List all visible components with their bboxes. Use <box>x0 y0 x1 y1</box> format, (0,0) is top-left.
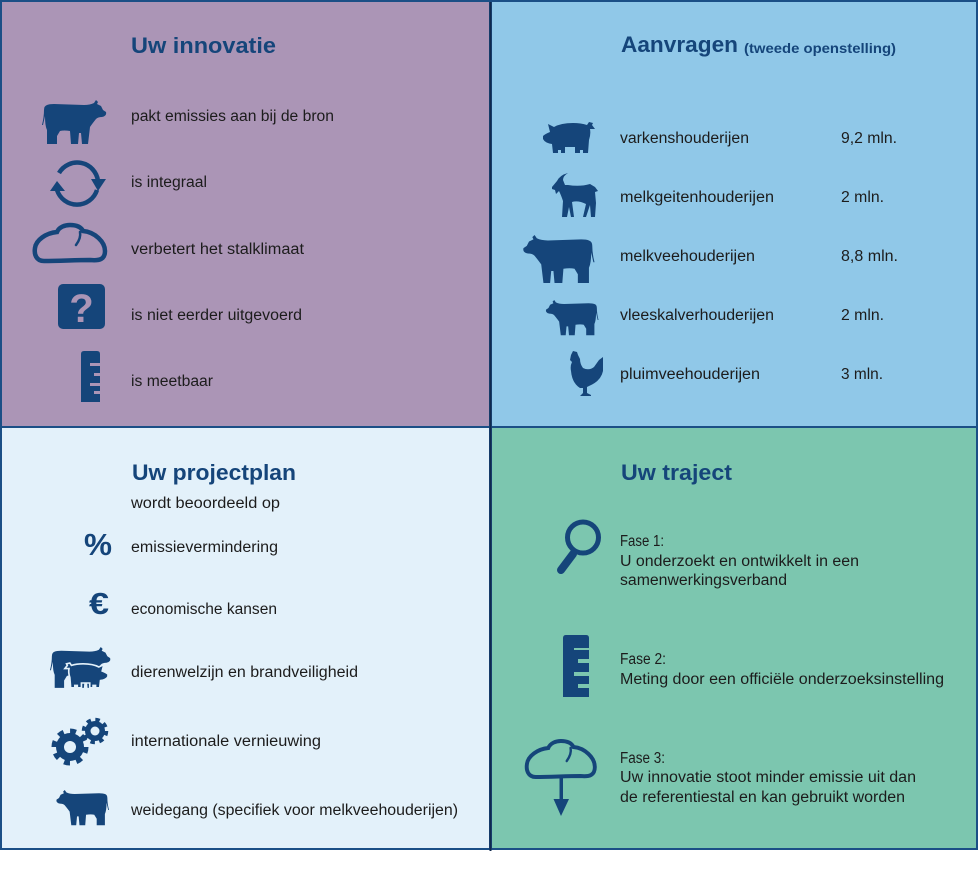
icon: ruler <box>81 351 100 402</box>
icon: question mark square: ? <box>69 287 94 331</box>
text: is niet eerder uitgevoerd: is niet eerder uitgevoerd <box>131 307 302 324</box>
icon: goat <box>552 173 598 217</box>
icon: cow <box>42 100 106 144</box>
text: fase 3: Uw innovatie stoot minder emissie uit dan <box>620 769 916 786</box>
text: is integraal: is integraal <box>131 174 207 191</box>
icon: pig <box>543 122 595 153</box>
icon: dairy cow <box>523 235 594 283</box>
panel: Uw traject <box>491 427 977 849</box>
icon: question mark square <box>58 284 105 331</box>
icon: percent: % <box>84 527 112 562</box>
text: melkgeitenhouderijen: melkgeitenhouderijen <box>620 189 774 206</box>
heading: Uw traject: Uw traject <box>621 460 733 485</box>
icon: cloud with down arrow <box>527 741 595 816</box>
text: fase 2 <box>620 651 944 688</box>
panel: Aanvragen <box>491 1 977 427</box>
text: internationale vernieuwing: internationale vernieuwing <box>131 733 321 750</box>
heading: Uw innovatie: Uw innovatie <box>131 33 276 58</box>
icon: cloud <box>35 225 105 261</box>
icon: chicken <box>570 351 603 396</box>
text: fase 2: Fase 2: <box>620 651 666 668</box>
icon: gears <box>54 720 106 763</box>
text: varkenshouderijen: varkenshouderijen <box>620 130 749 147</box>
text: fase 2: Meting door een officiële onderzoeksinstelling <box>620 671 944 688</box>
value: 9,2 mln.: 9,2 mln. <box>841 130 897 147</box>
text: wordt beoordeeld op: wordt beoordeeld op <box>130 495 280 512</box>
panel: Uw innovatie <box>1 1 490 427</box>
icon: cow <box>56 790 109 825</box>
icon: cow and pig <box>50 647 110 688</box>
text: fase 1: samenwerkingsverband <box>620 572 787 589</box>
panel: Uw projectplan <box>1 427 490 849</box>
text: verbetert het stalklimaat: verbetert het stalklimaat <box>131 241 305 258</box>
text: fase 3: Fase 3: <box>620 750 665 767</box>
text: pakt emissies aan bij de bron: pakt emissies aan bij de bron <box>131 108 334 125</box>
icon: veal calf <box>546 300 598 335</box>
icon: magnifying glass <box>561 522 598 570</box>
text: weidegang: weidegang (specifiek voor melkveehouderijen) <box>130 802 458 819</box>
value: 8,8 mln.: 8,8 mln. <box>841 248 898 265</box>
text: economische kansen: economische kansen <box>131 601 277 618</box>
subheading: tweede openstelling: (tweede openstelling) <box>744 40 896 56</box>
icon: ruler <box>563 635 589 697</box>
text: dierenwelzijn en brandveiligheid: dierenwelzijn en brandveiligheid <box>131 664 358 681</box>
icon: cycle arrows <box>50 163 106 205</box>
text: fase 1: U onderzoekt en ontwikkelt in een <box>620 553 859 570</box>
value: 2 mln.: 2 mln. <box>841 307 884 324</box>
heading: Aanvragen: Aanvragen <box>621 32 738 57</box>
text: fase 1: Fase 1: <box>620 533 664 550</box>
text: fase 1 <box>620 533 859 589</box>
text: fase 3 <box>620 750 916 806</box>
value: 3 mln.: 3 mln. <box>841 366 883 383</box>
icon: euro: € <box>89 586 109 621</box>
text: emissievermindering: emissievermindering <box>131 539 278 556</box>
text: vleeskalverhouderijen: vleeskalverhouderijen <box>620 307 774 324</box>
value: 2 mln.: 2 mln. <box>841 189 884 206</box>
text: pluimveehouderijen: pluimveehouderijen <box>620 366 760 383</box>
text: is meetbaar: is meetbaar <box>131 373 213 390</box>
text: fase 3: de referentiestal en kan gebruikt worden <box>620 789 905 806</box>
heading: Uw projectplan: Uw projectplan <box>132 460 296 485</box>
text: melkveehouderijen: melkveehouderijen <box>620 248 755 265</box>
